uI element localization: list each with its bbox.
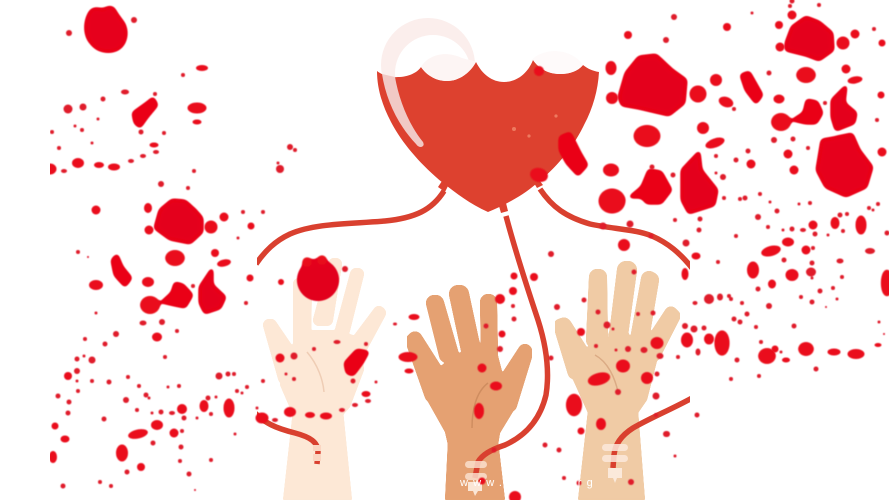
hand: left, pale skin	[269, 264, 380, 500]
watermark website text: www.heart.org	[459, 477, 598, 489]
hand: right, beige skin	[561, 270, 674, 500]
hand: middle, tan skin	[413, 294, 526, 500]
tube connectors and tape on wrists	[313, 444, 628, 496]
blood bag heart	[377, 18, 599, 213]
blood bag tubes	[255, 189, 692, 478]
